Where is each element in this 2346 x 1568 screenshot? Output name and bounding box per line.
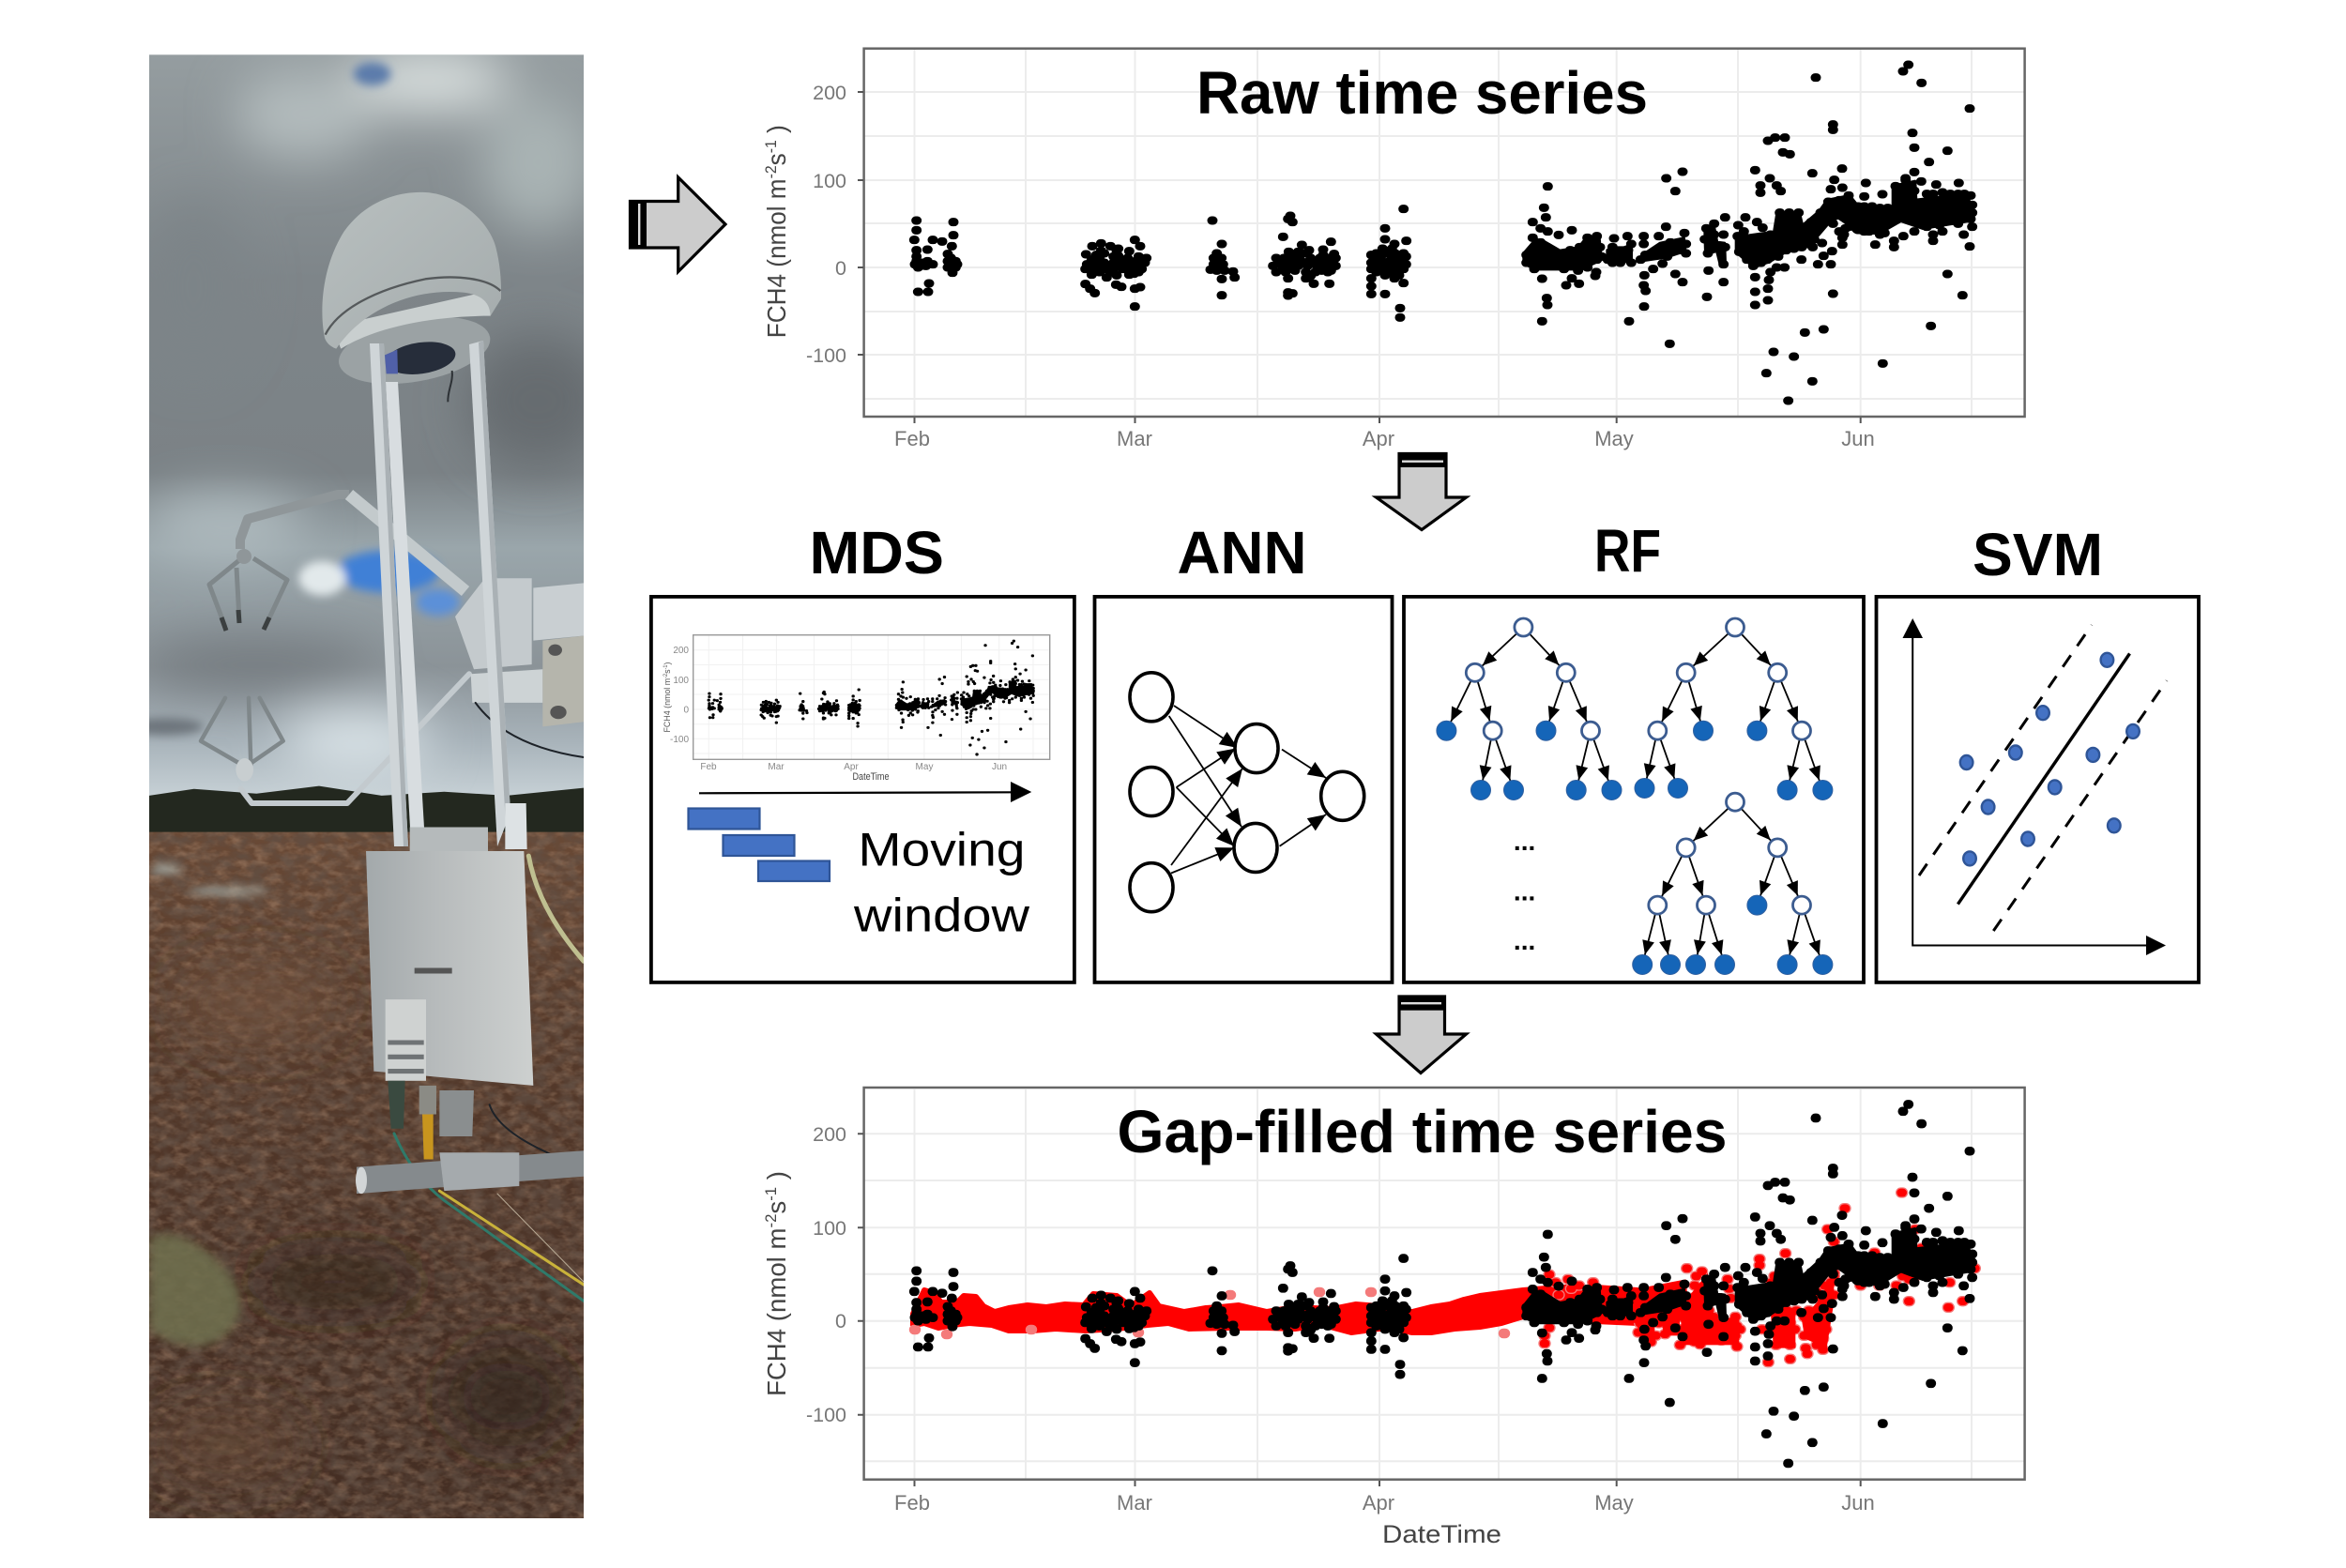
heading: ANN: ANN: [1177, 519, 1306, 586]
sky background: [149, 54, 584, 801]
y tick labels: [806, 82, 846, 367]
gap-filled red points: [913, 1193, 1975, 1362]
y tick labels: 200: [813, 82, 846, 104]
x month labels: Apr: [1363, 427, 1394, 450]
chart: raw time series: [762, 49, 2025, 450]
ground shadow texture: [149, 826, 584, 1518]
mini time series chart: -2: [663, 673, 669, 678]
dark and light ground patches: [150, 966, 570, 1483]
chart: gap-filled time series: [762, 1088, 2025, 1548]
y tick labels: [806, 1123, 846, 1426]
treeline: [149, 786, 584, 832]
clouds: [138, 52, 610, 769]
moss, water and treeline: [149, 786, 584, 1483]
chart frame: [864, 49, 2025, 417]
arrow: photo to raw series: [629, 177, 725, 272]
moving window label: [853, 823, 1030, 942]
moving window label: window: [853, 890, 1030, 942]
hanging wire: [448, 371, 452, 402]
y tick labels: -100: [806, 1404, 846, 1426]
mini time series chart: Feb: [700, 762, 717, 772]
mini time series chart: DateTime: [852, 771, 890, 783]
y tick labels: 100: [813, 170, 846, 192]
y tick labels: 100: [813, 1217, 846, 1240]
panel: MDS moving window: [651, 597, 1074, 982]
axes: [1903, 618, 2166, 955]
title: gap-filled time series: Gap-filled time series: [1117, 1098, 1727, 1165]
heading: MDS: MDS: [809, 519, 944, 586]
x month labels: Feb: [894, 1491, 930, 1515]
y axis title: -2: [762, 1214, 780, 1228]
water pools: [150, 864, 269, 895]
moving window label: Moving: [858, 823, 1025, 875]
dome shell: [322, 192, 501, 349]
title: raw time series: Raw time series: [1196, 59, 1648, 127]
x month labels: Mar: [1117, 427, 1152, 450]
y tick labels: 0: [835, 1310, 846, 1332]
mini time series chart: May: [916, 762, 933, 772]
chart grid: [864, 1089, 2024, 1479]
white collar band: [337, 291, 491, 349]
y axis title: ): [762, 1171, 791, 1187]
ground: [149, 828, 584, 1521]
x month labels: May: [1594, 427, 1634, 450]
y axis title: -1: [762, 1187, 780, 1201]
photo background: sky and peatland: [149, 54, 584, 1518]
mini time series chart: FCH4 (nmol m: [663, 675, 673, 732]
mini time series chart: Jun: [992, 762, 1007, 772]
y axis title: -1: [762, 140, 780, 153]
lower base plate: [339, 317, 490, 384]
tree 2: [1635, 618, 1833, 799]
dark lens: [394, 342, 456, 374]
mini time series chart: [663, 635, 1050, 783]
y axis title: s: [762, 153, 791, 165]
chart frame: [864, 1088, 2025, 1480]
analyzer body: [366, 803, 533, 1086]
x month labels: [894, 427, 1875, 450]
blue sky patches: [129, 63, 460, 736]
arrow: models to gap-filled series: [1376, 996, 1466, 1073]
junction box: [455, 578, 584, 757]
y axis title: -2: [762, 165, 780, 178]
x month labels: Feb: [894, 427, 930, 450]
y axis title: FCH4 (nmol m: [762, 1225, 791, 1396]
ellipsis marks for more trees: ...: [1514, 876, 1535, 906]
y axis title: s: [762, 1201, 791, 1214]
x month labels: May: [1594, 1491, 1634, 1515]
gas analyzer dome: [322, 192, 501, 402]
panel: ANN neural network: [1094, 597, 1393, 982]
chart grid: [864, 50, 2024, 416]
panel: SVM support vector machine: [1877, 597, 2199, 982]
heading: SVM: SVM: [1973, 521, 2103, 588]
x month labels: Jun: [1841, 1491, 1875, 1515]
mounting tube: [356, 1150, 584, 1194]
ellipsis marks for more trees: ...: [1514, 827, 1535, 856]
ellipsis marks for more trees: [1514, 827, 1535, 955]
y tick labels: 0: [835, 257, 846, 280]
network connections: [1169, 706, 1326, 873]
cables: [394, 856, 584, 1301]
y tick labels: 200: [813, 1123, 846, 1146]
ellipsis marks for more trees: ...: [1514, 926, 1535, 955]
tower struts: [370, 341, 510, 846]
y axis title: FCH4 (nmol m: [762, 167, 791, 338]
support vector points: [1960, 653, 2140, 865]
axis ticks: [858, 92, 1861, 423]
mini time series chart: -1: [663, 664, 669, 669]
separating hyperplane: [1958, 653, 2130, 905]
axis ticks: [858, 1134, 1861, 1486]
tree 1: [1437, 618, 1622, 799]
x month labels: Apr: [1363, 1491, 1394, 1515]
mini time series chart: Mar: [768, 762, 785, 772]
mini time series chart: 100: [673, 676, 689, 686]
arrow: time direction: [699, 782, 1031, 802]
mini time series chart: 0: [683, 706, 689, 715]
mini time series chart: Apr: [844, 762, 859, 772]
network nodes: [1130, 673, 1364, 912]
mini time series chart: 200: [673, 646, 689, 656]
tree 3: [1633, 793, 1833, 974]
mini time series chart: ): [663, 662, 673, 664]
x axis title: DateTime: [1382, 1520, 1501, 1548]
photo: eddy covariance tower in peatland: [149, 54, 584, 1518]
scatter points: [913, 65, 1973, 401]
x month labels: Jun: [1841, 427, 1875, 450]
observed black points: [913, 1104, 1973, 1463]
upper sonic anemometer: [209, 495, 465, 631]
mini time series chart: s: [663, 669, 673, 674]
ground texture: [149, 826, 584, 1518]
lower sonic anemometer: [201, 674, 469, 803]
y tick labels: -100: [806, 344, 846, 367]
margin lines: [1919, 625, 2167, 931]
y axis title: ): [762, 125, 791, 140]
moving window blocks: [689, 809, 830, 881]
panel: RF random forest: [1404, 597, 1864, 982]
moss patch: [149, 1234, 240, 1346]
x month labels: Mar: [1117, 1491, 1152, 1515]
mini time series chart: -100: [670, 735, 689, 745]
x month labels: [894, 1491, 1875, 1515]
arrow: raw series to models: [1376, 452, 1466, 529]
connectors under analyzer: [388, 1081, 474, 1159]
heading: RF: RF: [1594, 517, 1661, 585]
